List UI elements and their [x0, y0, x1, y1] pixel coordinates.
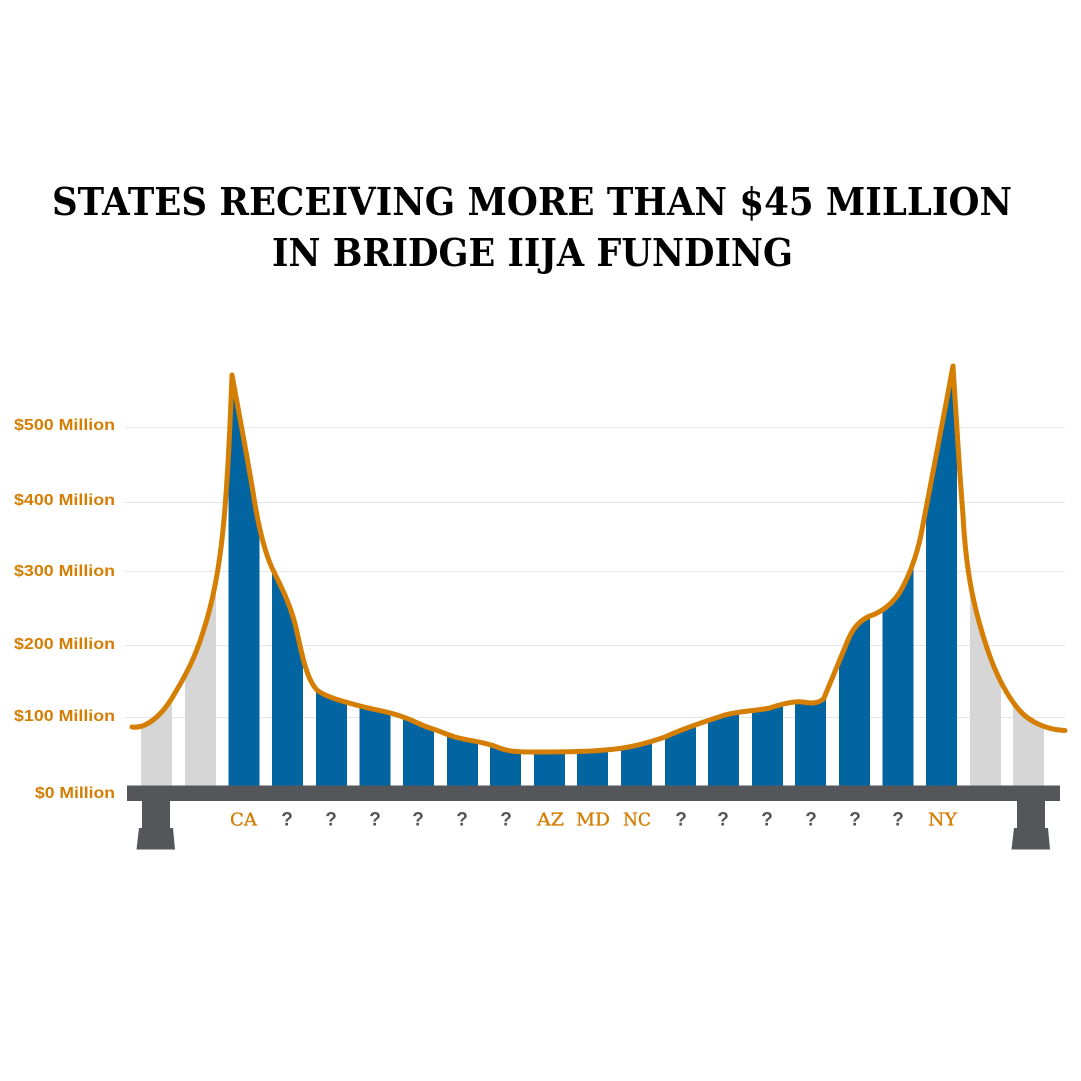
state labels: unknown: ?: [456, 810, 468, 830]
state labels: highlighted: AZ: [536, 810, 564, 830]
state labels: unknown: ?: [805, 810, 817, 830]
state labels: unknown: ?: [412, 810, 424, 830]
state labels: unknown: ?: [500, 810, 512, 830]
state labels: unknown: ?: [325, 810, 337, 830]
state labels: unknown: ?: [717, 810, 729, 830]
blue state bars: [228, 360, 957, 790]
y-axis labels: $400 Million: [14, 492, 115, 509]
y-axis labels: $500 Million: [14, 417, 115, 434]
y-axis labels: $300 Million: [14, 563, 115, 580]
title: IN BRIDGE IIJA FUNDING: [272, 230, 793, 275]
state labels: unknown: ?: [761, 810, 773, 830]
state labels: highlighted: CA: [230, 810, 258, 830]
y-axis labels: $100 Million: [14, 708, 115, 725]
state labels: unknown: ?: [849, 810, 861, 830]
state labels: highlighted: [230, 810, 958, 830]
bar chart: state funding bars: [141, 360, 1044, 790]
y-axis labels: [14, 417, 115, 802]
state labels: unknown: ?: [369, 810, 381, 830]
state labels: highlighted: MD: [576, 810, 610, 830]
gray end bars: [141, 594, 1044, 786]
y-axis labels: $0 Million: [35, 785, 115, 802]
bridge cable line: [132, 366, 1065, 752]
state labels: unknown: ?: [281, 810, 293, 830]
state labels: highlighted: NY: [928, 810, 958, 830]
state labels: highlighted: NC: [623, 810, 651, 830]
y-axis labels: $200 Million: [14, 636, 115, 653]
bridge deck and piers: [127, 786, 1060, 850]
state labels: unknown: ?: [675, 810, 687, 830]
title: STATES RECEIVING MORE THAN $45 MILLION: [52, 179, 1012, 224]
state labels: unknown: ?: [892, 810, 904, 830]
state labels: unknown: [281, 810, 904, 830]
title: [52, 179, 1012, 275]
